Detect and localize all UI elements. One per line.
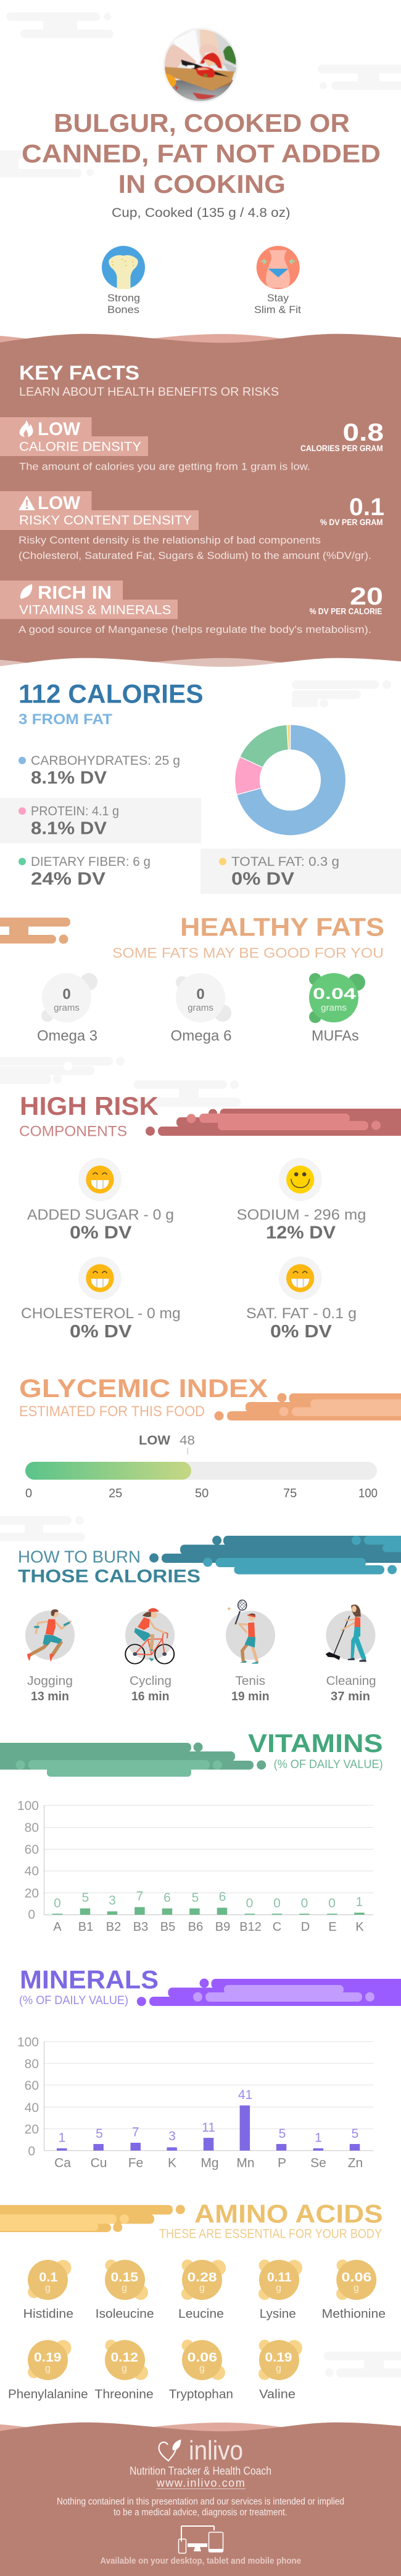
fat: omega 3: 0 [62, 986, 71, 1003]
amino: lysine: g [276, 2283, 281, 2294]
amino: histidine: Histidine [23, 2307, 73, 2321]
amino: isoleucine: Isoleucine [96, 2307, 154, 2321]
risk: sodium: 12% DV [266, 1223, 336, 1242]
macro: dietary fiber: 24% DV [31, 870, 106, 889]
amino: methionine: g [353, 2283, 359, 2294]
bar chart: minerals: 40 [25, 2101, 39, 2115]
macro: protein: PROTEIN: 4.1 g [31, 804, 119, 818]
risk: cholesterol [21, 1257, 181, 1342]
heading: vitamins: VITAMINS [248, 1729, 383, 1758]
amino: lysine: Lysine [260, 2307, 296, 2321]
risk: saturated fat: 0% DV [270, 1322, 333, 1342]
amino: valine [258, 2339, 302, 2401]
bar chart: vitamins: B5 [160, 1920, 175, 1934]
fact: rich in vitamins and minerals: 20 [350, 583, 383, 610]
heading: calories: 112 CALORIES [19, 680, 204, 709]
amino: methionine [322, 2259, 386, 2321]
heading: minerals [19, 1965, 159, 2007]
bar chart: minerals: 11 [202, 2121, 215, 2135]
fact: rich in vitamins and minerals: VITAMINS & MINERALS [19, 603, 172, 618]
bar chart: vitamins: 40 [25, 1864, 39, 1878]
bar chart: vitamins: 0 [273, 1896, 281, 1910]
risk: added sugar: 0% DV [70, 1223, 132, 1242]
icon and label: strong bones: Strong [107, 292, 140, 304]
activity labels: 16 min [131, 1690, 169, 1703]
macro: protein: 8.1% DV [31, 818, 107, 838]
amino: tryptophan: 0.06 [188, 2350, 217, 2365]
amino: isoleucine [96, 2259, 154, 2321]
heading: key facts [19, 362, 279, 399]
bar chart: vitamins: E [328, 1920, 337, 1934]
fact: low calorie density: CALORIES PER GRAM [300, 444, 383, 453]
heading: glycemic index: ESTIMATED FOR THIS FOOD [19, 1403, 205, 1420]
amino: leucine: Leucine [178, 2307, 224, 2321]
activity: tennis [226, 1600, 275, 1664]
footer text: to be a medical advice, diagnosis or treatment. [114, 2507, 287, 2518]
availability note: Available on your desktop, tablet and mobile phone [100, 2556, 301, 2566]
risk: saturated fat: SAT. FAT - 0.1 g [246, 1305, 357, 1322]
bar chart: vitamins: 20 [25, 1886, 39, 1901]
section deco: amino acids [0, 2205, 185, 2232]
fat: omega 6: grams [188, 1003, 213, 1013]
bar chart: vitamins: K [355, 1920, 364, 1934]
bar chart: minerals [17, 2035, 373, 2170]
amino: threonine [94, 2339, 154, 2401]
activity: cycling [125, 1608, 175, 1664]
bar chart: vitamins: 7 [136, 1889, 143, 1904]
heading: calories [19, 680, 204, 728]
risk: added sugar [27, 1158, 174, 1242]
amino: histidine [23, 2260, 73, 2321]
footer text: www.inlivo.com [156, 2477, 245, 2489]
logo: inlivo: inlivo [189, 2435, 243, 2466]
bar chart: minerals: Zn [348, 2156, 363, 2170]
risk: saturated fat [246, 1257, 357, 1342]
bar chart: minerals: Mg [200, 2156, 219, 2170]
bar chart: vitamins: 1 [356, 1895, 363, 1909]
section deco: vitamins [0, 1743, 266, 1777]
amino: valine: Valine [259, 2387, 296, 2401]
panel: key facts [0, 334, 401, 667]
heading: healthy fats: SOME FATS MAY BE GOOD FOR YOU [112, 945, 384, 961]
heading: amino acids [159, 2199, 383, 2241]
bar chart: vitamins: 80 [25, 1820, 39, 1835]
section deco: burn calories [149, 1536, 401, 1575]
heading: vitamins: (% OF DAILY VALUE) [274, 1758, 383, 1771]
heading: how to burn those calories [18, 1547, 200, 1587]
heading: minerals: (% OF DAILY VALUE) [19, 1994, 128, 2007]
amino: threonine: 0.12 [111, 2350, 138, 2365]
fact: rich in vitamins and minerals: A good source of Manganese (helps regulate the body's metabolism). [19, 624, 371, 635]
heading: key facts: KEY FACTS [19, 362, 139, 384]
bar chart: vitamins: B3 [133, 1920, 148, 1934]
amino: lysine [258, 2259, 302, 2321]
bar chart: minerals: P [278, 2156, 286, 2170]
fact: rich in vitamins and minerals: RICH IN [38, 583, 112, 603]
fat: mufas: 0.04 [313, 985, 356, 1003]
background cloud: calories [292, 680, 391, 707]
heading: how to burn those calories: THOSE CALORIES [18, 1567, 200, 1587]
title: CANNED, FAT NOT ADDED [22, 139, 381, 168]
risk: sodium: SODIUM - 296 mg [237, 1207, 366, 1223]
risk: added sugar: ADDED SUGAR - 0 g [27, 1207, 174, 1223]
bar chart: vitamins: B2 [106, 1920, 121, 1934]
glycemic scale: 75 [283, 1487, 297, 1501]
amino: methionine: Methionine [322, 2307, 386, 2321]
bar chart: vitamins: B9 [215, 1920, 230, 1934]
bar chart: vitamins: C [273, 1920, 281, 1934]
background cloud: amino acids [323, 2352, 401, 2378]
heading: key facts: LEARN ABOUT HEALTH BENEFITS OR RISKS [19, 386, 279, 399]
amino: phenylalanine: 0.19 [34, 2350, 62, 2365]
fat: omega 6: 0 [196, 986, 205, 1003]
bar chart: minerals: 7 [132, 2126, 139, 2140]
section deco: healthy fats [0, 918, 70, 944]
bar chart: vitamins: A [53, 1920, 62, 1934]
amino: isoleucine: 0.15 [111, 2270, 138, 2285]
bar chart: minerals: 100 [17, 2035, 39, 2050]
bar chart: vitamins: 0 [328, 1896, 336, 1910]
heading: how to burn those calories: HOW TO BURN [18, 1547, 141, 1567]
bar chart: minerals: 5 [352, 2127, 358, 2141]
heading: glycemic index: GLYCEMIC INDEX [19, 1374, 268, 1403]
section deco: glycemic index [215, 1393, 401, 1420]
logo: inlivo [159, 2435, 243, 2466]
fact: low calorie density: The amount of calories you are getting from 1 gram is low. [19, 461, 310, 472]
macro: total fat [200, 849, 401, 894]
bar chart: minerals: 1 [315, 2131, 322, 2145]
glycemic scale: 25 [109, 1487, 122, 1501]
bar chart: minerals: Fe [128, 2156, 143, 2170]
macro: total fat: TOTAL FAT: 0.3 g [231, 854, 339, 869]
bar chart: minerals: 41 [238, 2088, 252, 2102]
fact: rich in vitamins and minerals [0, 581, 383, 635]
icon and label: stay slim and fit: Stay [267, 292, 289, 304]
bar chart: minerals: 3 [168, 2129, 176, 2143]
bar chart: vitamins: 0 [28, 1908, 35, 1922]
fact: rich in vitamins and minerals: % DV PER CALORIE [310, 607, 382, 616]
activity labels: 37 min [331, 1690, 370, 1703]
heading: high risk components: HIGH RISK [20, 1091, 159, 1120]
bar chart: vitamins: 6 [163, 1891, 171, 1905]
fact: low risky content density: 0.1 [349, 494, 384, 521]
section deco: high risk [146, 1109, 401, 1136]
bar chart: minerals: K [168, 2156, 176, 2170]
title: BULGUR, COOKED OR [54, 108, 350, 137]
activity labels: Cycling [130, 1674, 172, 1688]
bar chart: vitamins: 60 [25, 1843, 39, 1857]
amino: isoleucine: g [122, 2283, 127, 2294]
heading: high risk components: COMPONENTS [19, 1123, 127, 1140]
bar chart: vitamins: 0 [54, 1896, 61, 1910]
bar chart: minerals: Mn [236, 2156, 255, 2170]
heading: healthy fats [112, 913, 384, 961]
amino: tryptophan [169, 2339, 233, 2401]
amino: tryptophan: Tryptophan [169, 2387, 233, 2401]
activity labels: 19 min [231, 1690, 270, 1703]
heading: glycemic index [19, 1374, 268, 1420]
heading: minerals: MINERALS [20, 1965, 159, 1994]
heading: vitamins [248, 1729, 383, 1771]
amino: phenylalanine [8, 2340, 88, 2401]
bar chart: minerals: 60 [25, 2079, 39, 2093]
fat: mufas: grams [321, 1003, 347, 1013]
risk: cholesterol: CHOLESTEROL - 0 mg [21, 1305, 181, 1322]
bar chart: vitamins: B6 [188, 1920, 203, 1934]
risk: sodium [237, 1158, 366, 1242]
bar chart: minerals: Cu [91, 2156, 107, 2170]
bar chart: vitamins: 5 [82, 1891, 89, 1905]
macro: dietary fiber: DIETARY FIBER: 6 g [31, 854, 151, 869]
fact: low calorie density: CALORIE DENSITY [19, 439, 141, 454]
bar chart: minerals: 0 [28, 2145, 35, 2158]
glycemic scale: 100 [358, 1487, 378, 1501]
amino: leucine [178, 2259, 226, 2321]
fat: omega 3 [37, 973, 97, 1044]
fact: low calorie density: 0.8 [343, 419, 384, 446]
bar chart: vitamins: D [301, 1920, 310, 1934]
footer text: Nutrition Tracker & Health Coach [130, 2464, 271, 2477]
bar chart: minerals: 1 [58, 2131, 65, 2145]
footer text [57, 2464, 344, 2518]
bar chart: vitamins: 5 [192, 1891, 199, 1905]
macro: total fat: 0% DV [231, 870, 295, 889]
activity labels: Jogging [27, 1674, 73, 1688]
macro: dietary fiber [19, 854, 151, 889]
fact: low risky content density: RISKY CONTENT DENSITY [19, 513, 192, 528]
serving size: Cup, Cooked (135 g / 4.8 oz) [112, 206, 290, 220]
food photo [162, 26, 239, 107]
amino: histidine: g [45, 2283, 51, 2294]
fact: low calorie density: LOW [38, 419, 81, 439]
bar chart: vitamins: 0 [301, 1896, 308, 1910]
amino: phenylalanine: g [45, 2363, 51, 2374]
heading: amino acids: AMINO ACIDS [194, 2199, 383, 2228]
amino: methionine: 0.06 [342, 2270, 371, 2285]
fact: low risky content density: % DV PER GRAM [320, 518, 383, 527]
amino: valine: g [276, 2363, 281, 2374]
bar chart: minerals: Ca [54, 2156, 71, 2170]
macro: protein [0, 798, 201, 843]
background clouds: high risk [0, 1057, 241, 1107]
bar chart: vitamins: 100 [17, 1799, 39, 1813]
amino: phenylalanine: Phenylalanine [8, 2387, 88, 2401]
background cloud: burn calories [0, 1516, 85, 1541]
amino: valine: 0.19 [265, 2350, 292, 2365]
glycemic scale [25, 1433, 378, 1501]
icon and label: strong bones: Bones [107, 304, 139, 316]
glycemic scale: 48 [180, 1433, 195, 1448]
amino: threonine: Threonine [94, 2387, 154, 2401]
fat: omega 3: grams [54, 1003, 80, 1013]
activity: jogging [25, 1609, 75, 1662]
fat: omega 6: Omega 6 [170, 1028, 232, 1044]
bar chart: minerals: 20 [25, 2122, 39, 2137]
fact: low risky content density: Risky Content density is the relationship of bad components [19, 535, 321, 546]
bar chart: vitamins [17, 1799, 373, 1934]
heading: healthy fats: HEALTHY FATS [180, 913, 384, 942]
icon: devices [179, 2526, 223, 2553]
bar chart: minerals: 5 [96, 2127, 103, 2141]
bar chart: vitamins: 6 [219, 1889, 226, 1904]
amino: threonine: g [122, 2363, 127, 2374]
panel: footer [0, 2423, 401, 2576]
bar chart: vitamins: B1 [78, 1920, 93, 1934]
heading: high risk components [19, 1091, 159, 1140]
background clouds: header [0, 12, 401, 177]
bar chart: vitamins: 0 [246, 1896, 253, 1910]
bar chart: minerals: Se [310, 2156, 326, 2170]
macro: carbohydrates [19, 753, 180, 788]
heading: calories: 3 FROM FAT [19, 711, 112, 728]
title: IN COOKING [118, 169, 286, 198]
macro: carbohydrates: 8.1% DV [31, 768, 107, 788]
bar chart: vitamins: 3 [109, 1893, 116, 1908]
footer text: Nothing contained in this presentation and our services is intended or implied [57, 2497, 344, 2507]
fact: low risky content density: LOW [38, 493, 81, 513]
title [22, 108, 381, 198]
fact: low calorie density [0, 417, 384, 472]
glycemic scale: LOW [139, 1433, 170, 1448]
fat: mufas: MUFAs [312, 1028, 359, 1044]
fact: low risky content density: (Cholesterol, Saturated Fat, Sugars & Sodium) to the amount (%DV/gr). [19, 550, 371, 561]
amino: histidine: 0.1 [39, 2270, 58, 2285]
section deco: minerals [137, 1978, 401, 2006]
amino: leucine: 0.28 [188, 2270, 217, 2285]
activity labels: Tenis [236, 1674, 265, 1688]
risk: cholesterol: 0% DV [70, 1322, 132, 1342]
icon and label: stay slim and fit: Slim & Fit [254, 304, 301, 316]
macro: carbohydrates: CARBOHYDRATES: 25 g [31, 753, 180, 768]
amino: lysine: 0.11 [267, 2270, 292, 2285]
fact: low risky content density [0, 491, 384, 561]
icon and label: strong bones [102, 246, 145, 316]
amino: tryptophan: g [199, 2363, 205, 2374]
activity: cleaning [326, 1605, 375, 1662]
icon and label: stay slim and fit [254, 246, 301, 316]
glycemic scale: 50 [195, 1487, 209, 1501]
fat: omega 3: Omega 3 [37, 1028, 97, 1044]
bar chart: minerals: 80 [25, 2057, 39, 2071]
fat: omega 6 [170, 973, 232, 1044]
bar chart: vitamins: B12 [239, 1920, 262, 1934]
donut chart [235, 725, 345, 836]
fat: mufas [309, 973, 365, 1044]
amino: leucine: g [199, 2283, 205, 2294]
glycemic scale: 0 [25, 1487, 32, 1501]
activity labels: Cleaning [326, 1674, 376, 1688]
bar chart: minerals: 5 [279, 2127, 286, 2141]
activity labels: 13 min [31, 1690, 69, 1703]
activity labels [27, 1674, 376, 1703]
